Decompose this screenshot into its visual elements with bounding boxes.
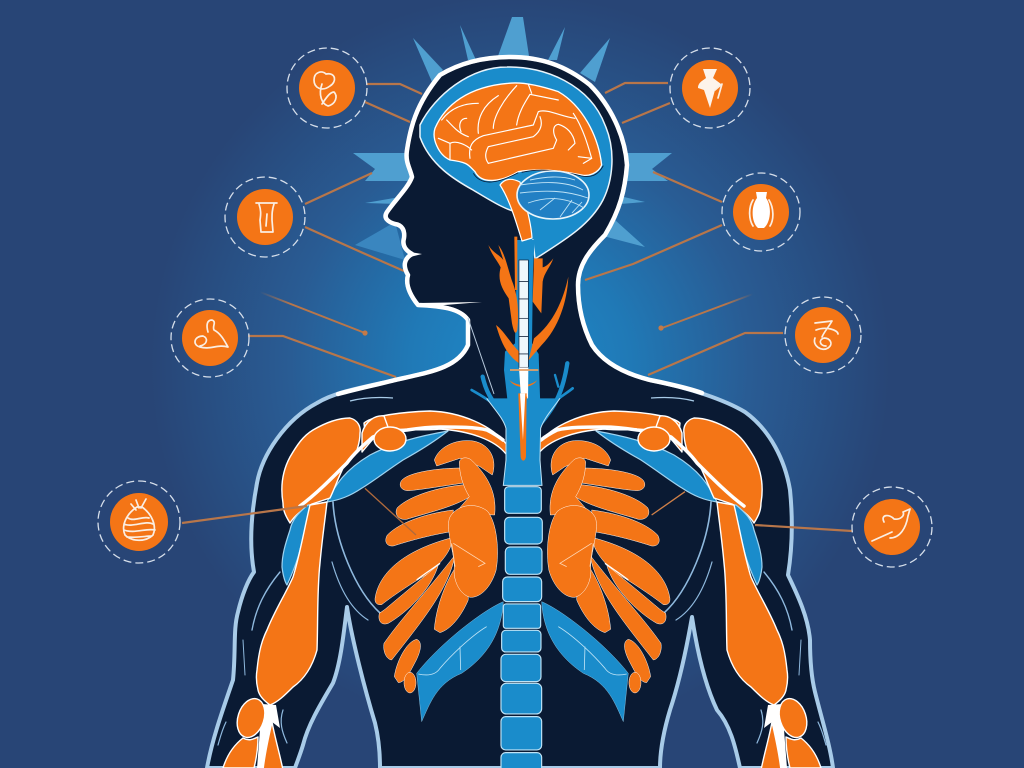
rib 3 — [386, 510, 453, 546]
neck spine and nerves — [472, 237, 573, 460]
finger rib B — [384, 555, 455, 660]
connector over right arm — [755, 525, 852, 531]
white rib highlight — [417, 563, 440, 580]
brain gyri lines — [438, 84, 592, 163]
small blob — [404, 672, 416, 693]
connector over left arm — [182, 506, 307, 523]
neck blue column — [504, 240, 541, 460]
blue shoulder strap — [327, 431, 448, 502]
inner left connector — [365, 488, 416, 535]
rib 4 — [375, 538, 451, 605]
connector lines — [248, 83, 783, 377]
inner right connector — [652, 492, 685, 515]
blue upper-arm muscle — [282, 505, 311, 585]
lobe crease — [452, 543, 485, 567]
shoulder detail — [350, 397, 393, 401]
spine column top — [487, 398, 560, 485]
left arm and shoulder — [218, 397, 507, 768]
clavicle white band — [300, 427, 503, 506]
icon node: middle left — [171, 299, 249, 377]
forearm — [223, 737, 258, 768]
vertebrae — [501, 487, 542, 768]
deltoid second lobe — [362, 416, 388, 452]
facial detail strokes — [410, 252, 482, 307]
elbow white tendon — [257, 704, 280, 768]
blue cranial cavity — [420, 67, 612, 259]
spine column edge lines — [487, 398, 560, 485]
shoulder joint — [374, 427, 406, 451]
icon node: middle upper left — [225, 177, 305, 257]
mushroom lobe — [434, 441, 494, 475]
finger rib C — [434, 568, 468, 633]
brain stem — [500, 179, 532, 241]
lower blue lobe — [417, 602, 503, 722]
arm contour lines — [218, 502, 380, 745]
large oval lobe — [449, 506, 498, 597]
neck side line — [468, 318, 494, 394]
central orange needle — [518, 393, 527, 461]
deltoid — [282, 418, 360, 523]
left ribs and lung — [375, 441, 503, 722]
radiating rays behind head — [353, 17, 672, 260]
brain orange lobes — [434, 83, 602, 180]
icon node: top right — [670, 48, 750, 128]
finger rib A — [379, 565, 438, 624]
rib 1 — [400, 468, 467, 491]
rib 2 — [396, 485, 470, 519]
forearm strip — [263, 722, 283, 768]
orange nerve flames — [488, 237, 568, 387]
chest organs in zoomed coordinates — [365, 393, 685, 768]
clavicle — [364, 411, 507, 454]
icon node: lower left — [98, 481, 180, 563]
small rib — [394, 639, 420, 683]
lower lobe lines — [418, 627, 487, 675]
forearm ball — [232, 695, 270, 741]
brain — [434, 83, 603, 182]
white needle core — [520, 393, 525, 440]
icon node: middle right — [785, 297, 861, 373]
neck blue branches — [472, 363, 573, 427]
right arm and shoulder — [537, 397, 826, 768]
brain dark shadow edge — [473, 166, 603, 182]
cerebellum — [517, 171, 589, 219]
strip lobe — [455, 458, 495, 515]
human silhouette — [207, 57, 833, 768]
white spinal segments — [519, 260, 528, 367]
icon node: lower right — [852, 487, 932, 567]
icon node: middle upper right — [722, 173, 800, 251]
icon node: top left — [287, 48, 367, 128]
right ribs and lung — [542, 441, 670, 722]
head and neck white outline — [338, 57, 702, 394]
upper arm — [256, 502, 327, 705]
